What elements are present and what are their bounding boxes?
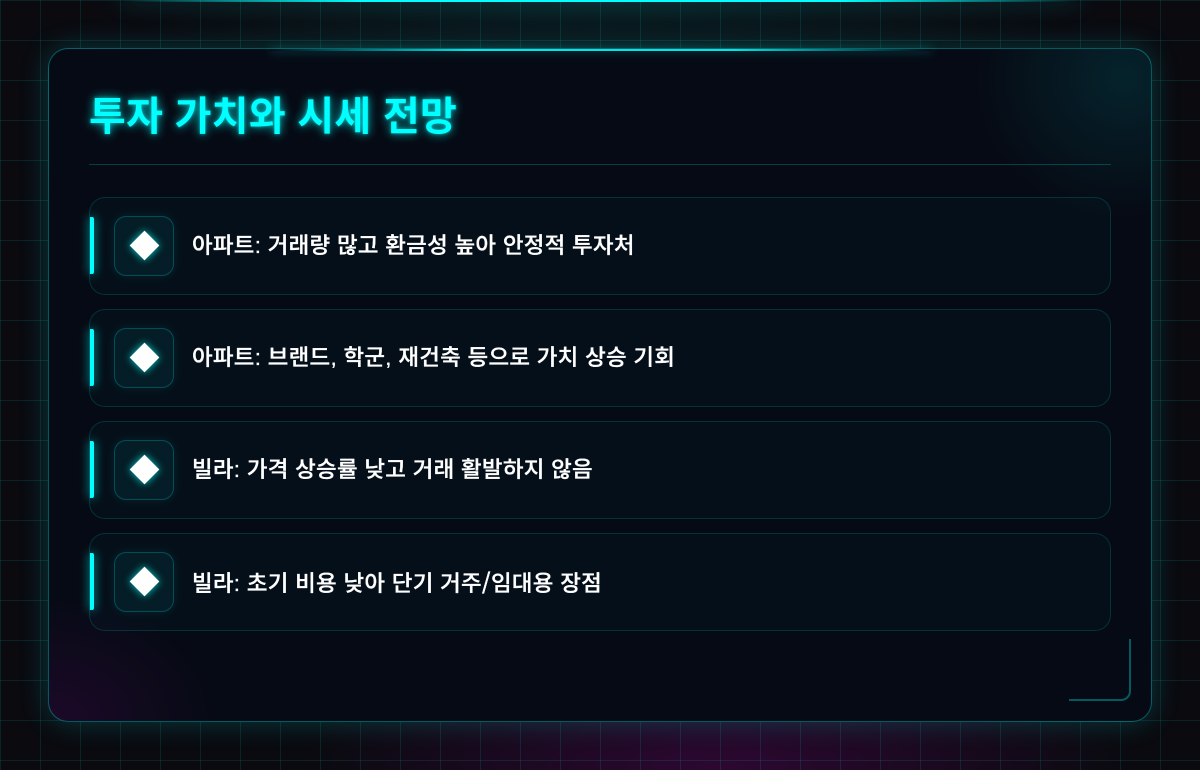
icon: diamond 3 bbox=[114, 440, 174, 500]
item text 3: 빌라: 가격 상승률 낮고 거래 활발하지 않음 bbox=[192, 457, 593, 482]
list item 1 bbox=[89, 197, 1111, 295]
item text 2: 아파트: 브랜드, 학군, 재건축 등으로 가치 상승 기회 bbox=[192, 345, 675, 370]
list item 3 bbox=[89, 421, 1111, 519]
icon: diamond 4 bbox=[114, 552, 174, 612]
top glowing bar bbox=[120, 0, 1080, 2]
list item 2 bbox=[89, 309, 1111, 407]
corner bracket bbox=[1069, 639, 1131, 701]
item text 1: 아파트: 거래량 많고 환금성 높아 안정적 투자처 bbox=[192, 233, 635, 258]
item text 4: 빌라: 초기 비용 낮아 단기 거주/임대용 장점 bbox=[192, 566, 602, 598]
title: 투자 가치와 시세 전망 bbox=[89, 95, 457, 139]
icon: diamond 1 bbox=[114, 216, 174, 276]
list item 4 bbox=[89, 533, 1111, 631]
icon: diamond 2 bbox=[114, 328, 174, 388]
